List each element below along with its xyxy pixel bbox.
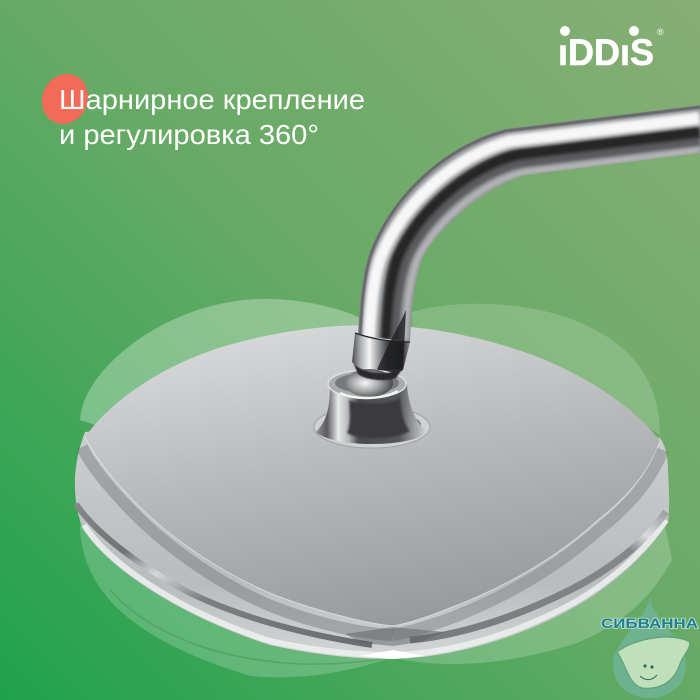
logo wordmark: ıDDıS bbox=[558, 32, 654, 73]
dark cone window bbox=[347, 398, 410, 438]
plate inner edge line bbox=[85, 437, 660, 626]
IDDIS logo bbox=[558, 26, 664, 73]
dark rim left bbox=[76, 504, 372, 645]
logo i dots bbox=[560, 26, 639, 36]
lower tube below collar bbox=[352, 333, 410, 375]
hub cone body bbox=[316, 384, 427, 444]
tub face bbox=[640, 664, 657, 680]
translucent left crossing band bbox=[82, 447, 393, 635]
bright crossing point bbox=[360, 650, 425, 659]
water drop bbox=[613, 597, 686, 698]
white rim highlight bbox=[84, 520, 666, 655]
arm tube bbox=[358, 105, 700, 342]
registered mark: ® bbox=[657, 27, 664, 37]
ghost plate: upper left position bbox=[80, 299, 360, 430]
dark rim right bbox=[410, 512, 666, 640]
ghost plate: lower rotated position bbox=[80, 500, 672, 677]
ball joint hub bbox=[314, 362, 430, 448]
ghost plate: upper right position bbox=[412, 304, 660, 435]
chrome arm bbox=[340, 90, 700, 375]
hub top ring bbox=[328, 370, 406, 398]
heading line 2: и регулировка 360° bbox=[59, 119, 319, 150]
crossing center shading bbox=[345, 627, 445, 646]
ring recess bbox=[335, 373, 399, 393]
main plate bbox=[85, 325, 660, 626]
ball highlight lip bbox=[340, 391, 398, 398]
neck base bbox=[353, 362, 403, 380]
shower head bbox=[75, 299, 672, 677]
translucent right crossing band bbox=[393, 450, 663, 635]
red accent circle bbox=[34, 67, 96, 131]
heading line 1: Шарнирное крепление bbox=[59, 84, 365, 115]
arm dark wedge bbox=[376, 310, 406, 372]
ball bbox=[345, 369, 393, 397]
heading group bbox=[34, 67, 365, 150]
lens plate with rim bbox=[75, 400, 669, 659]
flange shadow ring bbox=[323, 410, 421, 440]
watermark: Sibvanna bbox=[601, 597, 698, 698]
watermark text: СИБВАННА bbox=[601, 615, 698, 631]
collar seam bbox=[355, 333, 410, 342]
hub flange bbox=[314, 406, 430, 448]
bathtub bbox=[617, 637, 690, 688]
